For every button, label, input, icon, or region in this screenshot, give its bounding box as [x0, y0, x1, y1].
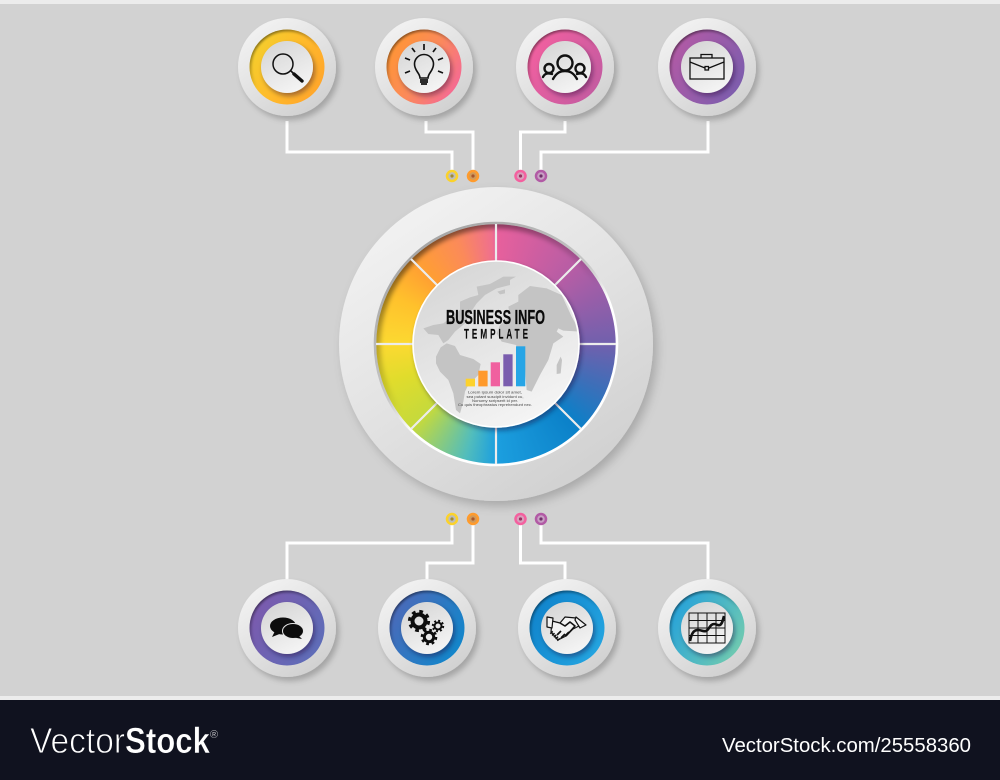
- icon: speech bubbles: [270, 618, 304, 639]
- logo: Stock: [125, 720, 211, 761]
- title: [446, 307, 545, 342]
- colour ring: [376, 224, 616, 464]
- logo: ®: [210, 729, 218, 741]
- button: briefcase: [658, 18, 756, 116]
- title: BUSINESS INFO: [446, 307, 545, 329]
- connectors: bottom: [287, 524, 708, 580]
- button: idea: [375, 18, 473, 116]
- body text: [458, 390, 532, 407]
- icon: light bulb: [405, 44, 443, 84]
- world map: [423, 277, 580, 413]
- body text: sea putant suscipit invidunt cu,: [466, 394, 524, 399]
- connector dots: bottom: [447, 514, 546, 524]
- icon: magnifier: [273, 54, 302, 81]
- footer band: [0, 700, 1000, 780]
- body text: Cu quis theophrastus reprehendunt nec.: [458, 402, 532, 407]
- icon: briefcase: [690, 54, 724, 79]
- panel: central wheel: [339, 187, 653, 501]
- logo: [30, 720, 218, 761]
- body text: Lorem ipsum dolor sit amet,: [468, 390, 522, 394]
- image id: VectorStock.com/25558360: [722, 735, 971, 757]
- body text: Nonumy scripserit id per.: [472, 398, 518, 403]
- button: team: [516, 18, 614, 116]
- title: TEMPLATE: [464, 328, 528, 342]
- connectors: top: [287, 121, 708, 172]
- button: chat: [238, 579, 336, 677]
- button: gears: [378, 579, 476, 677]
- button: search: [238, 18, 336, 116]
- connector dots: top: [447, 171, 546, 181]
- icon: handshake: [547, 617, 586, 640]
- button: chart: [658, 579, 756, 677]
- icon: gears: [410, 612, 443, 644]
- button: handshake: [518, 579, 616, 677]
- bar chart: [466, 346, 525, 386]
- icon: line chart: [689, 613, 725, 643]
- logo: Vector: [30, 720, 125, 761]
- icon: people: [543, 56, 586, 79]
